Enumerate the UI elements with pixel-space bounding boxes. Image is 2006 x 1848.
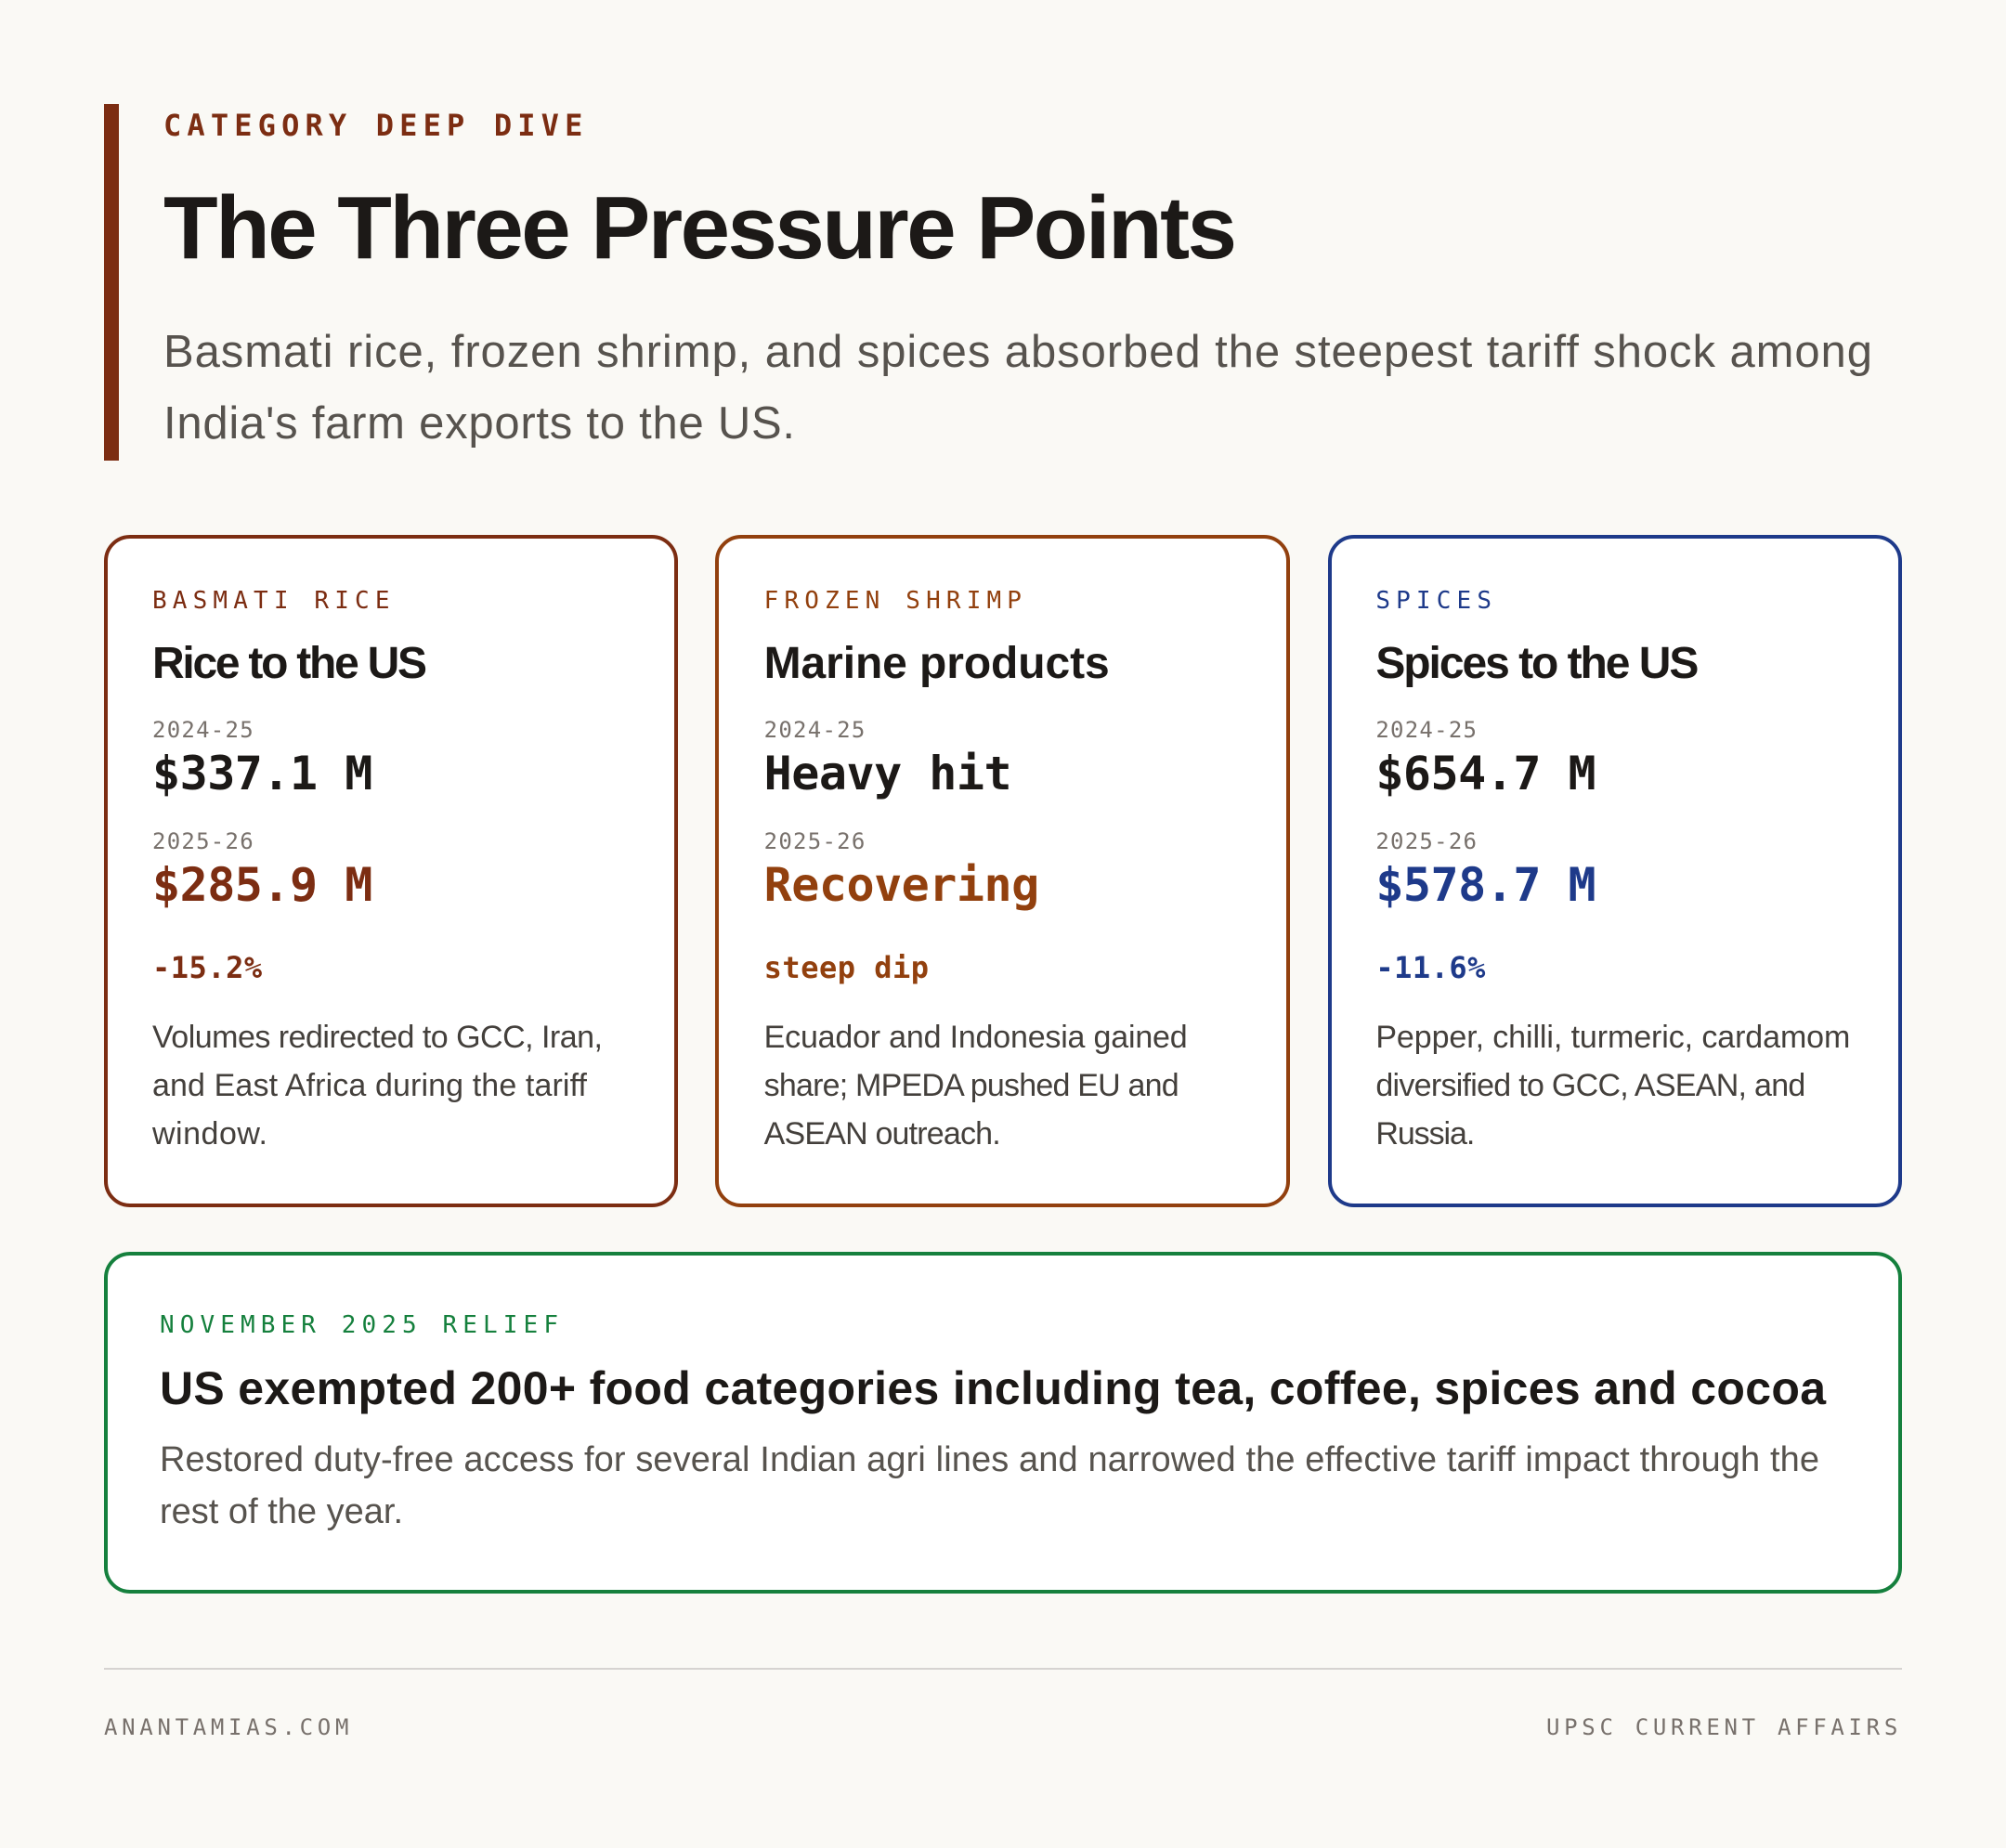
title: The Three Pressure Points — [163, 178, 1237, 278]
panel: november relief — [106, 1254, 1900, 1592]
description: and East Africa during the tariff — [152, 1068, 588, 1103]
subtitle: India's farm exports to the US. — [163, 398, 795, 449]
card title: Spices to the US — [1375, 639, 1699, 688]
description: Russia. — [1375, 1116, 1475, 1152]
eyebrow: CATEGORY DEEP DIVE — [163, 108, 588, 143]
description: Ecuador and Indonesia gained — [764, 1020, 1188, 1055]
description — [151, 1020, 603, 1152]
panel: basmati rice — [106, 537, 676, 1205]
2024-25 figure — [1375, 717, 1596, 800]
description: diversified to GCC, ASEAN, and — [1375, 1068, 1805, 1103]
footer left: ANANTAMIAS.COM — [104, 1714, 353, 1740]
card title: Marine products — [764, 639, 1110, 688]
card label: FROZEN SHRIMP — [764, 587, 1027, 615]
2024-25 figure: Heavy hit — [764, 747, 1011, 800]
card label: SPICES — [1375, 587, 1497, 615]
relief label: NOVEMBER 2025 RELIEF — [160, 1311, 564, 1339]
2025-26 figure: $578.7 M — [1375, 858, 1596, 912]
2025-26 figure: $285.9 M — [152, 858, 372, 912]
accent bar — [104, 104, 119, 461]
2024-25 figure — [764, 717, 1011, 800]
change: -15.2% — [152, 950, 263, 985]
description — [1375, 1020, 1850, 1152]
subtitle: Basmati rice, frozen shrimp, and spices absorbed the steepest tariff shock among — [163, 327, 1872, 377]
panel: frozen shrimp — [717, 537, 1288, 1205]
2024-25 figure: $654.7 M — [1375, 747, 1596, 800]
description: ASEAN outreach. — [764, 1116, 1001, 1152]
2025-26 figure — [1375, 828, 1596, 912]
relief description: rest of the year. — [160, 1492, 403, 1531]
description: share; MPEDA pushed EU and — [764, 1068, 1179, 1103]
2024-25 figure: 2024-25 — [1375, 717, 1478, 743]
2025-26 figure: 2025-26 — [1375, 828, 1478, 854]
relief description — [160, 1440, 1819, 1531]
change: -11.6% — [1375, 950, 1486, 985]
description: Pepper, chilli, turmeric, cardamom — [1375, 1020, 1850, 1055]
2024-25 figure — [152, 717, 372, 800]
relief description: Restored duty-free access for several Indian agri lines and narrowed the effective tariff impact through the — [160, 1440, 1819, 1479]
relief heading: US exempted 200+ food categories including tea, coffee, spices and cocoa — [160, 1362, 1827, 1414]
description: Volumes redirected to GCC, Iran, — [152, 1020, 603, 1055]
subtitle — [163, 327, 1872, 449]
2024-25 figure: 2024-25 — [764, 717, 866, 743]
2025-26 figure — [764, 828, 1039, 912]
header block — [104, 104, 1872, 461]
2025-26 figure: 2025-26 — [764, 828, 866, 854]
change: steep dip — [764, 950, 930, 985]
description — [764, 1020, 1188, 1152]
2025-26 figure — [152, 828, 372, 912]
footer — [104, 1714, 1902, 1740]
2024-25 figure: $337.1 M — [152, 747, 372, 800]
card title: Rice to the US — [152, 639, 427, 688]
2024-25 figure: 2024-25 — [152, 717, 254, 743]
description: window. — [151, 1116, 267, 1152]
card label: BASMATI RICE — [152, 587, 396, 615]
footer right: UPSC CURRENT AFFAIRS — [1546, 1714, 1902, 1740]
2025-26 figure: 2025-26 — [152, 828, 254, 854]
2025-26 figure: Recovering — [764, 858, 1039, 912]
panel: spices — [1330, 537, 1900, 1205]
